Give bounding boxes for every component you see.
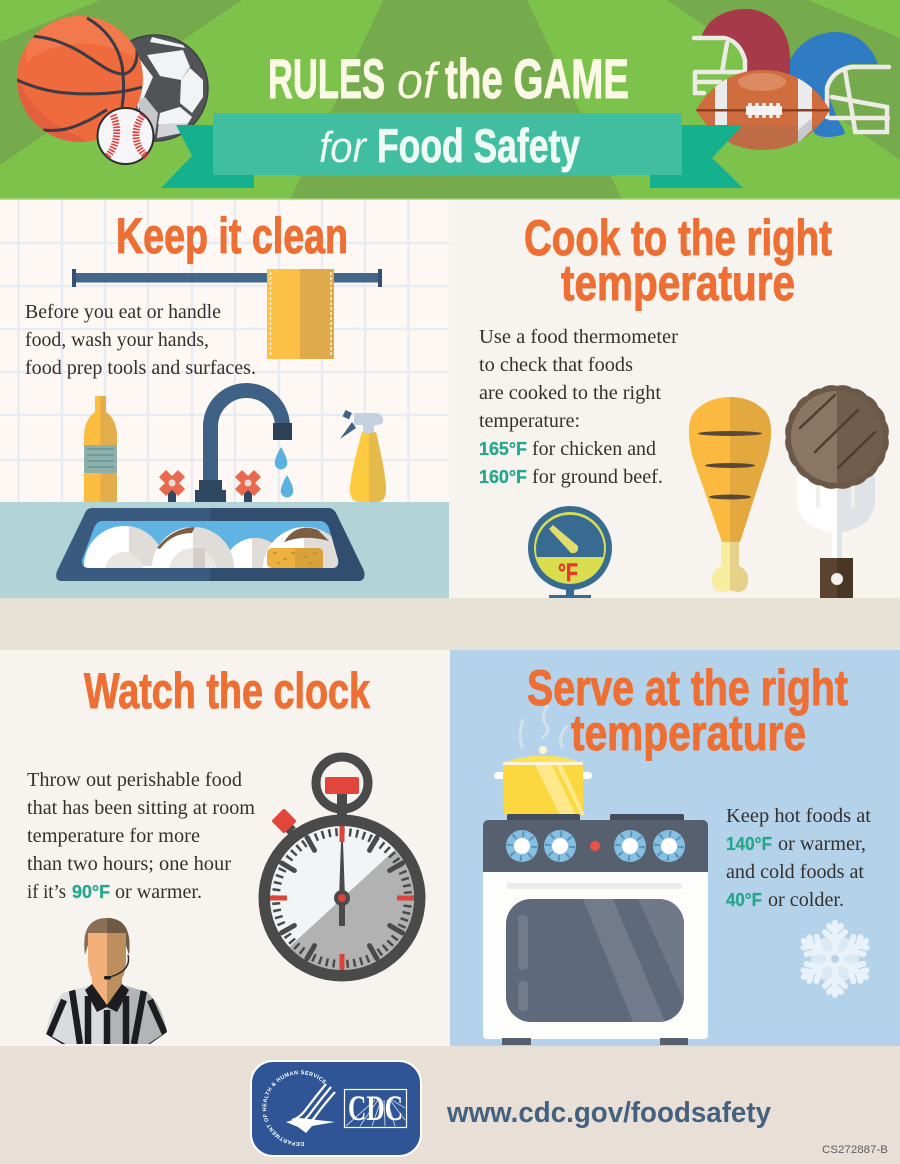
text: serve temperatures: [726, 806, 872, 911]
text: temperatures: [479, 327, 679, 488]
text: temperatures: 160°F: [479, 466, 527, 487]
icon: basketball: [17, 10, 143, 150]
text: temperatures: Use a food thermometer: [479, 327, 679, 348]
panel: cook to the right temperature: [449, 200, 900, 599]
icon: faucet handles: [162, 474, 258, 502]
logo: HHS and CDC: [250, 1060, 422, 1157]
url: www.cdc.gov/foodsafety: [446, 1097, 771, 1129]
icon: water drops: [275, 447, 293, 498]
title: the GAME: [445, 47, 629, 110]
heading: Keep it clean: [116, 208, 348, 264]
ribbon: [213, 113, 682, 175]
text: temperatures: are cooked to the right: [479, 383, 662, 404]
icon: referee: [46, 918, 167, 1048]
icon: burger patty: [786, 386, 888, 488]
text: temperatures: for ground beef.: [532, 467, 663, 488]
text: serve temperatures: and cold foods at: [726, 862, 865, 883]
text: perishable food: temperature for more: [27, 826, 200, 847]
icon: sink with dishes: [56, 508, 364, 581]
heading: [527, 660, 848, 761]
text: temperatures: 165°F: [479, 438, 527, 459]
icon: steam: [520, 706, 566, 747]
text: serve temperatures: or warmer,: [778, 834, 866, 855]
heading: [524, 210, 832, 311]
icon: food thermometer: °F: [558, 559, 578, 587]
title: RULES: [268, 47, 385, 110]
heading: temperature: [571, 705, 806, 761]
document code: CS272887-B: [822, 1144, 888, 1156]
icon: baseball: [98, 108, 154, 164]
text: serve temperatures: 40°F: [726, 889, 762, 910]
icon: food thermometer: [528, 506, 612, 599]
logo: HHS and CDC: DEPARTMENT OF HEALTH & HUMAN SERVICES · USA: [262, 1070, 327, 1146]
text: keep it clean: [25, 302, 256, 379]
icon: soccer ball: [102, 35, 208, 141]
icon: red helmet: [694, 9, 790, 100]
icon: spray bottle: [340, 410, 386, 502]
heading: Watch the clock: [84, 663, 370, 719]
text: serve temperatures: or colder.: [768, 890, 844, 911]
text: perishable food: that has been sitting at room: [27, 798, 255, 819]
ribbon tails: [161, 125, 743, 188]
header banner: [0, 0, 900, 200]
icon: pot: [494, 746, 592, 815]
text: perishable food: than two hours; one hour: [27, 854, 232, 875]
icon: dish soap bottle: [84, 396, 117, 502]
icon: football: [696, 70, 830, 150]
text: keep it clean: food prep tools and surfaces.: [25, 358, 256, 379]
icon: blue helmet: [790, 32, 889, 137]
logo: HHS and CDC: CDC: [348, 1088, 403, 1128]
text: temperatures: for chicken and: [532, 439, 656, 460]
icon: faucet: [195, 390, 292, 502]
panel: watch the clock: [0, 650, 450, 1048]
subtitle: Food Safety: [377, 119, 580, 172]
divider band: [0, 598, 900, 650]
panel: keep it clean: [0, 200, 450, 611]
text: perishable food: or warmer.: [115, 882, 202, 903]
icon: stove: [483, 814, 708, 1045]
text: serve temperatures: 140°F: [726, 833, 772, 854]
icon: snowflake: [799, 923, 871, 995]
text: keep it clean: Before you eat or handle: [25, 302, 221, 323]
text: perishable food: 90°F: [72, 881, 110, 902]
icon: chicken drumstick: [689, 397, 771, 592]
title: of: [397, 53, 441, 109]
subtitle: for: [319, 123, 368, 172]
title: [268, 47, 629, 110]
text: perishable food: [27, 770, 255, 903]
subtitle: [319, 119, 580, 172]
icon: stopwatch: [258, 757, 430, 1000]
panel: serve at the right temperature: [450, 650, 900, 1046]
text: serve temperatures: Keep hot foods at: [726, 806, 872, 827]
text: temperatures: to check that foods: [479, 355, 633, 376]
text: temperatures: temperature:: [479, 411, 580, 432]
text: perishable food: Throw out perishable food: [27, 770, 242, 791]
text: keep it clean: food, wash your hands,: [25, 330, 209, 351]
icon: towel rack: [72, 269, 382, 359]
heading: temperature: [561, 255, 795, 311]
text: perishable food: if it’s: [27, 882, 66, 903]
icon: spatula: [797, 475, 875, 598]
